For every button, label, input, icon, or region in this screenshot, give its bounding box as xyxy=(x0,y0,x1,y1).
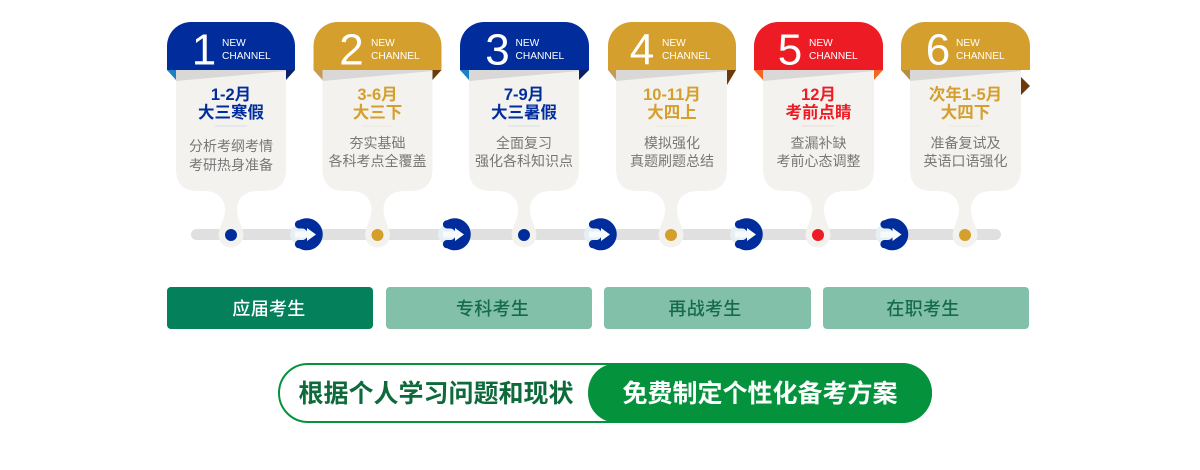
card 6 period: 大四下 xyxy=(941,103,990,122)
card 3 period xyxy=(491,86,558,122)
card 6 body and stem xyxy=(910,70,1021,231)
card 6 right marker xyxy=(1021,77,1030,95)
tab: 在职考生: 在职考生 xyxy=(886,299,960,319)
card 4 header xyxy=(608,22,736,74)
card 4 timeline node xyxy=(658,222,684,248)
card 5 divider xyxy=(802,126,834,127)
card 3 period: 大三暑假 xyxy=(491,103,558,122)
card 5 period: 考前点睛 xyxy=(786,103,852,122)
card 6 timeline node xyxy=(952,222,978,248)
card 3 xyxy=(460,22,589,248)
card 2 xyxy=(314,22,442,248)
pill outline xyxy=(279,364,931,422)
card 5 header xyxy=(754,22,883,74)
card 5 header: 5 xyxy=(778,26,802,74)
card 5 right fold xyxy=(874,70,883,80)
card 3 left fold xyxy=(460,70,469,80)
card 1 left fold xyxy=(167,70,176,80)
arrow 3 xyxy=(584,218,617,250)
tab: 应届考生 xyxy=(167,287,373,329)
pill green segment xyxy=(588,363,932,423)
card 6 header: CHANNEL xyxy=(956,51,1005,62)
card 1 period xyxy=(198,86,264,122)
card 2 description xyxy=(328,135,426,169)
card 1 body and stem xyxy=(176,70,286,231)
card 2 description: 各科考点全覆盖 xyxy=(328,153,426,169)
card 2 description: 夯实基础 xyxy=(350,135,406,151)
card 2 header xyxy=(314,22,442,74)
card 4 header: CHANNEL xyxy=(662,51,711,62)
card 1 period: 大三寒假 xyxy=(198,102,264,122)
card 6 header xyxy=(901,22,1030,74)
tab: 在职考生 xyxy=(823,287,1029,329)
card 5 timeline node xyxy=(806,222,830,248)
card 2 period: 大三下 xyxy=(353,103,402,122)
card 3 timeline node xyxy=(512,222,536,248)
tab: 再战考生 xyxy=(604,287,811,329)
card 5 period xyxy=(786,86,852,122)
timeline track xyxy=(191,229,1001,240)
card 2 fold shadow xyxy=(322,70,432,81)
card 6 header: NEW xyxy=(956,38,980,49)
card 3 period: 7-9月 xyxy=(504,86,544,104)
card 5 period: 12月 xyxy=(801,86,836,104)
card 2 header: 2 xyxy=(339,26,364,74)
card 4 period xyxy=(643,86,701,122)
card 2 header: NEW xyxy=(371,38,395,49)
card 5 description: 查漏补缺 xyxy=(790,135,846,151)
card 1 header: 1 xyxy=(192,26,216,74)
card 3 header xyxy=(460,22,589,74)
card 1 xyxy=(167,22,295,248)
card 3 header: CHANNEL xyxy=(516,51,565,62)
card 5 header: NEW xyxy=(809,38,833,49)
card 1 period: 1-2月 xyxy=(211,86,251,104)
card 2 divider xyxy=(362,126,394,127)
card 5 xyxy=(754,22,883,248)
card 4 left fold xyxy=(608,70,616,80)
card 6 left fold xyxy=(901,70,910,80)
card 1 header: NEW xyxy=(222,38,246,49)
call to action pill xyxy=(279,363,932,423)
card 1 fold shadow xyxy=(176,70,286,81)
card 6 description: 英语口语强化 xyxy=(924,153,1008,169)
card 6 divider xyxy=(949,126,981,127)
pill right text: 免费制定个性化备考方案 xyxy=(622,379,898,408)
arrow 5 xyxy=(876,218,908,250)
card 1 description: 分析考纲考情 xyxy=(189,138,273,154)
card 6 xyxy=(901,22,1030,248)
card 2 body and stem xyxy=(322,70,432,231)
card 4 description xyxy=(630,135,714,169)
card 1 header: CHANNEL xyxy=(222,51,271,62)
card 4 right fold xyxy=(727,70,736,85)
card 3 fold shadow xyxy=(469,70,579,81)
arrow 1 xyxy=(290,218,323,250)
pill left text: 根据个人学习问题和现状 xyxy=(298,380,574,408)
card 5 body and stem xyxy=(763,70,874,231)
card 4 period: 10-11月 xyxy=(643,86,701,104)
card 5 left fold xyxy=(754,70,763,80)
card 4 header: NEW xyxy=(662,38,686,49)
tab: 再战考生: 再战考生 xyxy=(668,299,742,319)
card 5 fold shadow xyxy=(763,70,874,81)
card 4 divider xyxy=(655,126,687,127)
card 5 description xyxy=(776,135,860,169)
tab: 专科考生 xyxy=(386,287,592,329)
card 4 description: 真题刷题总结 xyxy=(630,153,714,169)
card 1 description xyxy=(189,138,273,173)
card 2 period xyxy=(353,86,402,122)
card 4 body and stem xyxy=(616,70,727,231)
card 5 description: 考前心态调整 xyxy=(776,153,860,169)
card 3 right fold xyxy=(579,70,589,80)
card 2 timeline node xyxy=(365,222,390,248)
card 3 body and stem xyxy=(469,70,579,231)
card 3 description: 强化各科知识点 xyxy=(475,153,573,169)
card 6 description: 准备复试及 xyxy=(930,135,1000,151)
tab: 应届考生: 应届考生 xyxy=(232,298,306,319)
card 4 fold shadow xyxy=(616,70,727,81)
card 4 header: 4 xyxy=(630,26,654,74)
card 6 period xyxy=(929,84,1002,122)
card 2 header: CHANNEL xyxy=(371,51,420,62)
tab: 专科考生: 专科考生 xyxy=(456,299,529,319)
card 3 description: 全面复习 xyxy=(496,135,552,151)
card 5 header: CHANNEL xyxy=(809,51,858,62)
card 1 divider xyxy=(215,126,247,127)
card 3 header: 3 xyxy=(485,26,510,74)
card 3 divider xyxy=(508,126,540,127)
card 3 description xyxy=(475,135,573,169)
card 6 description xyxy=(924,135,1008,169)
card 2 right fold xyxy=(432,70,442,80)
card 4 description: 模拟强化 xyxy=(644,135,700,151)
arrow 4 xyxy=(730,218,763,250)
arrow 2 xyxy=(438,218,471,250)
card 6 header: 6 xyxy=(926,26,950,74)
card 6 period: 次年1-5月 xyxy=(929,84,1002,104)
card 2 period: 3-6月 xyxy=(357,86,398,104)
card 4 xyxy=(608,22,736,248)
card 1 description: 考研热身准备 xyxy=(189,157,273,173)
card 6 fold shadow xyxy=(910,70,1021,81)
card 2 left fold xyxy=(314,70,322,80)
card 4 period: 大四上 xyxy=(647,103,697,122)
card 1 timeline node xyxy=(218,222,244,248)
card 1 header xyxy=(167,22,295,74)
card 3 header: NEW xyxy=(516,38,540,49)
card 1 right fold xyxy=(286,70,295,80)
